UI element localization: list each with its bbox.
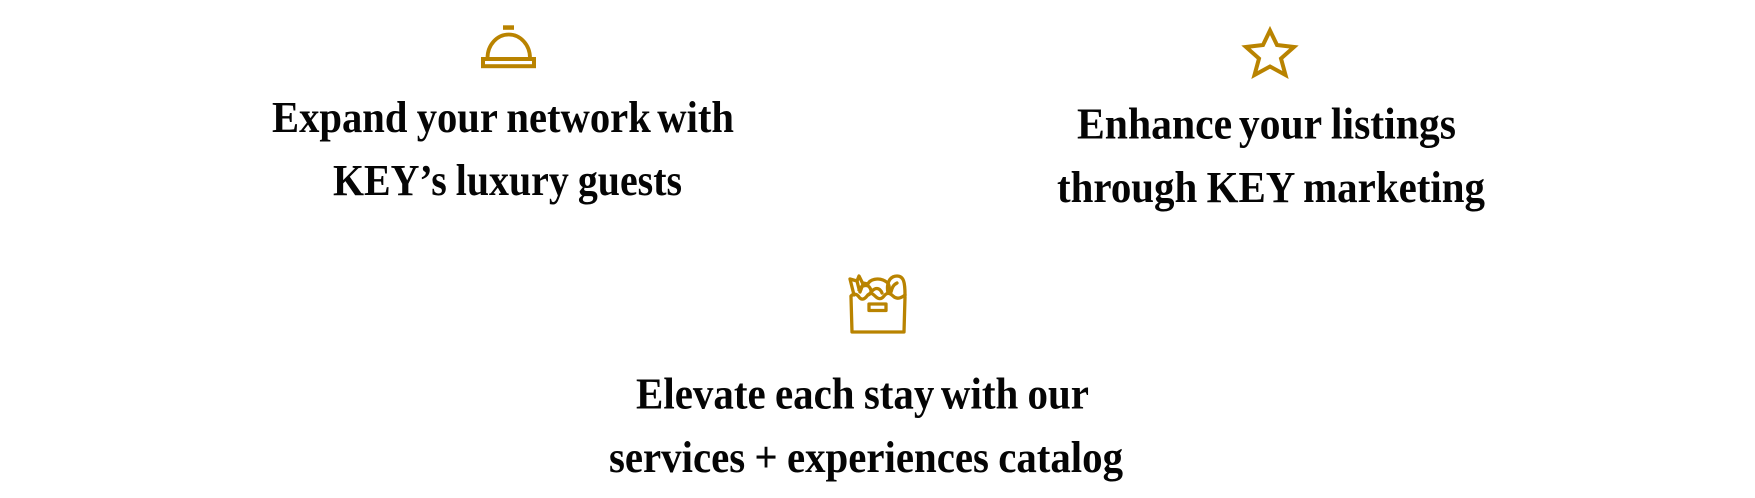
icon: service bell: [483, 25, 534, 66]
heading: expand network: KEY’s luxury guests: [333, 156, 682, 205]
heading: expand network: [272, 93, 734, 205]
heading: enhance listings: Enhance your listings: [1077, 100, 1456, 148]
heading: enhance listings: through KEY marketing: [1057, 163, 1485, 212]
icon: star: [1246, 30, 1294, 75]
icon: grocery bag: [850, 276, 905, 332]
heading: elevate stay: Elevate each stay with our: [636, 370, 1089, 418]
heading: expand network: Expand your network with: [272, 93, 734, 142]
heading: elevate stay: [609, 370, 1123, 482]
heading: elevate stay: services + experiences catalog: [609, 433, 1123, 482]
heading: enhance listings: [1057, 100, 1485, 212]
